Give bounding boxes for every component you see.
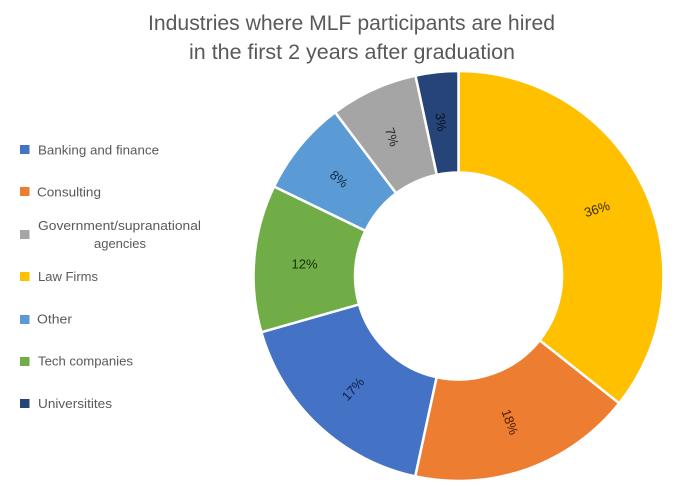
legend item: Other [20, 312, 73, 326]
legend item: Universitites: Universitites [38, 396, 113, 411]
legend item: Banking and finance: Banking and finance [38, 142, 159, 158]
segment: Banking and finance 17% [261, 304, 437, 476]
legend item: Other: Other [37, 312, 73, 326]
legend [20, 142, 201, 411]
segment: Universitites 3% [416, 71, 458, 175]
segment: Consulting 18% [415, 340, 619, 481]
segment: Other 8% [274, 112, 396, 231]
legend item: Government/supranational agencies: Government/supranational [38, 218, 201, 233]
title: in the first 2 years after graduation [189, 41, 515, 64]
legend item: Government/supranational agencies [20, 218, 201, 251]
segment: Tech companies 12% [254, 186, 365, 332]
segment: Law Firms 36% [458, 71, 664, 403]
legend item: Law Firms: Law Firms [38, 269, 98, 284]
segment: Consulting 18%: 18% [499, 407, 522, 437]
legend item: Tech companies: Tech companies [38, 354, 133, 368]
title [148, 12, 555, 64]
segment: Government/supranational agencies 7% [335, 76, 437, 193]
segment: Government/supranational agencies 7%: 7% [382, 126, 402, 149]
segment: Tech companies 12%: 12% [291, 256, 318, 272]
legend item: Government/supranational agencies: agencies [94, 236, 146, 251]
segment: Law Firms 36%: 36% [582, 198, 612, 220]
title: Industries where MLF participants are hired [148, 12, 555, 35]
donut chart [254, 71, 664, 481]
segment: Banking and finance 17%: 17% [339, 374, 368, 404]
legend item: Consulting: Consulting [37, 184, 101, 200]
segment: Other 8%: 8% [327, 167, 351, 191]
segment: Universitites 3%: 3% [432, 112, 450, 133]
